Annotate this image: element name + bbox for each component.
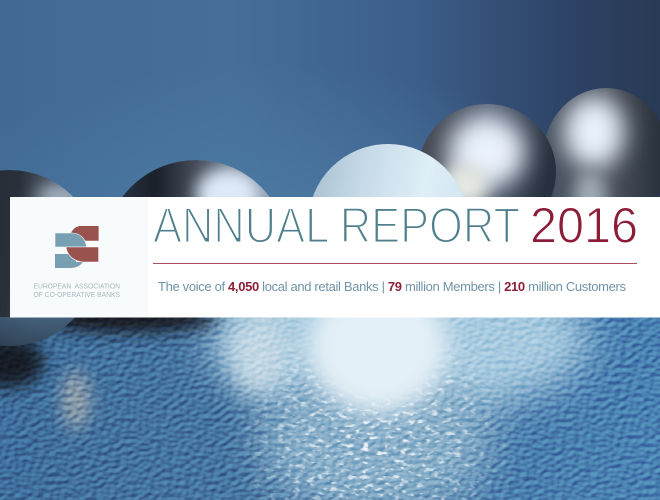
sphere: far left chrome ball [0,170,74,317]
divider rule [153,263,637,264]
tagline: key figures: The voice of 4,050 local and retail Banks | 79 million Members | 210 million Customers [158,279,626,294]
sphere: left chrome ball [122,160,270,197]
background: blue sky gradient [0,0,660,320]
logo: European Association of Co-operative Banks [34,226,120,290]
sphere: white pearl ball [308,144,468,304]
banner: white title panel [10,197,660,318]
title: annual report: ANNUAL REPORT [153,198,520,254]
sphere: right chrome ball [421,104,556,197]
logo wordmark: EUROPEAN ASSOCIATION [34,281,120,290]
sphere: far right chrome ball [546,88,660,197]
logo wordmark second line: OF CO-OPERATIVE BANKS [34,290,120,299]
floor: rippled glass reflection [0,317,660,500]
title: year 2016: 2016 [530,198,638,254]
